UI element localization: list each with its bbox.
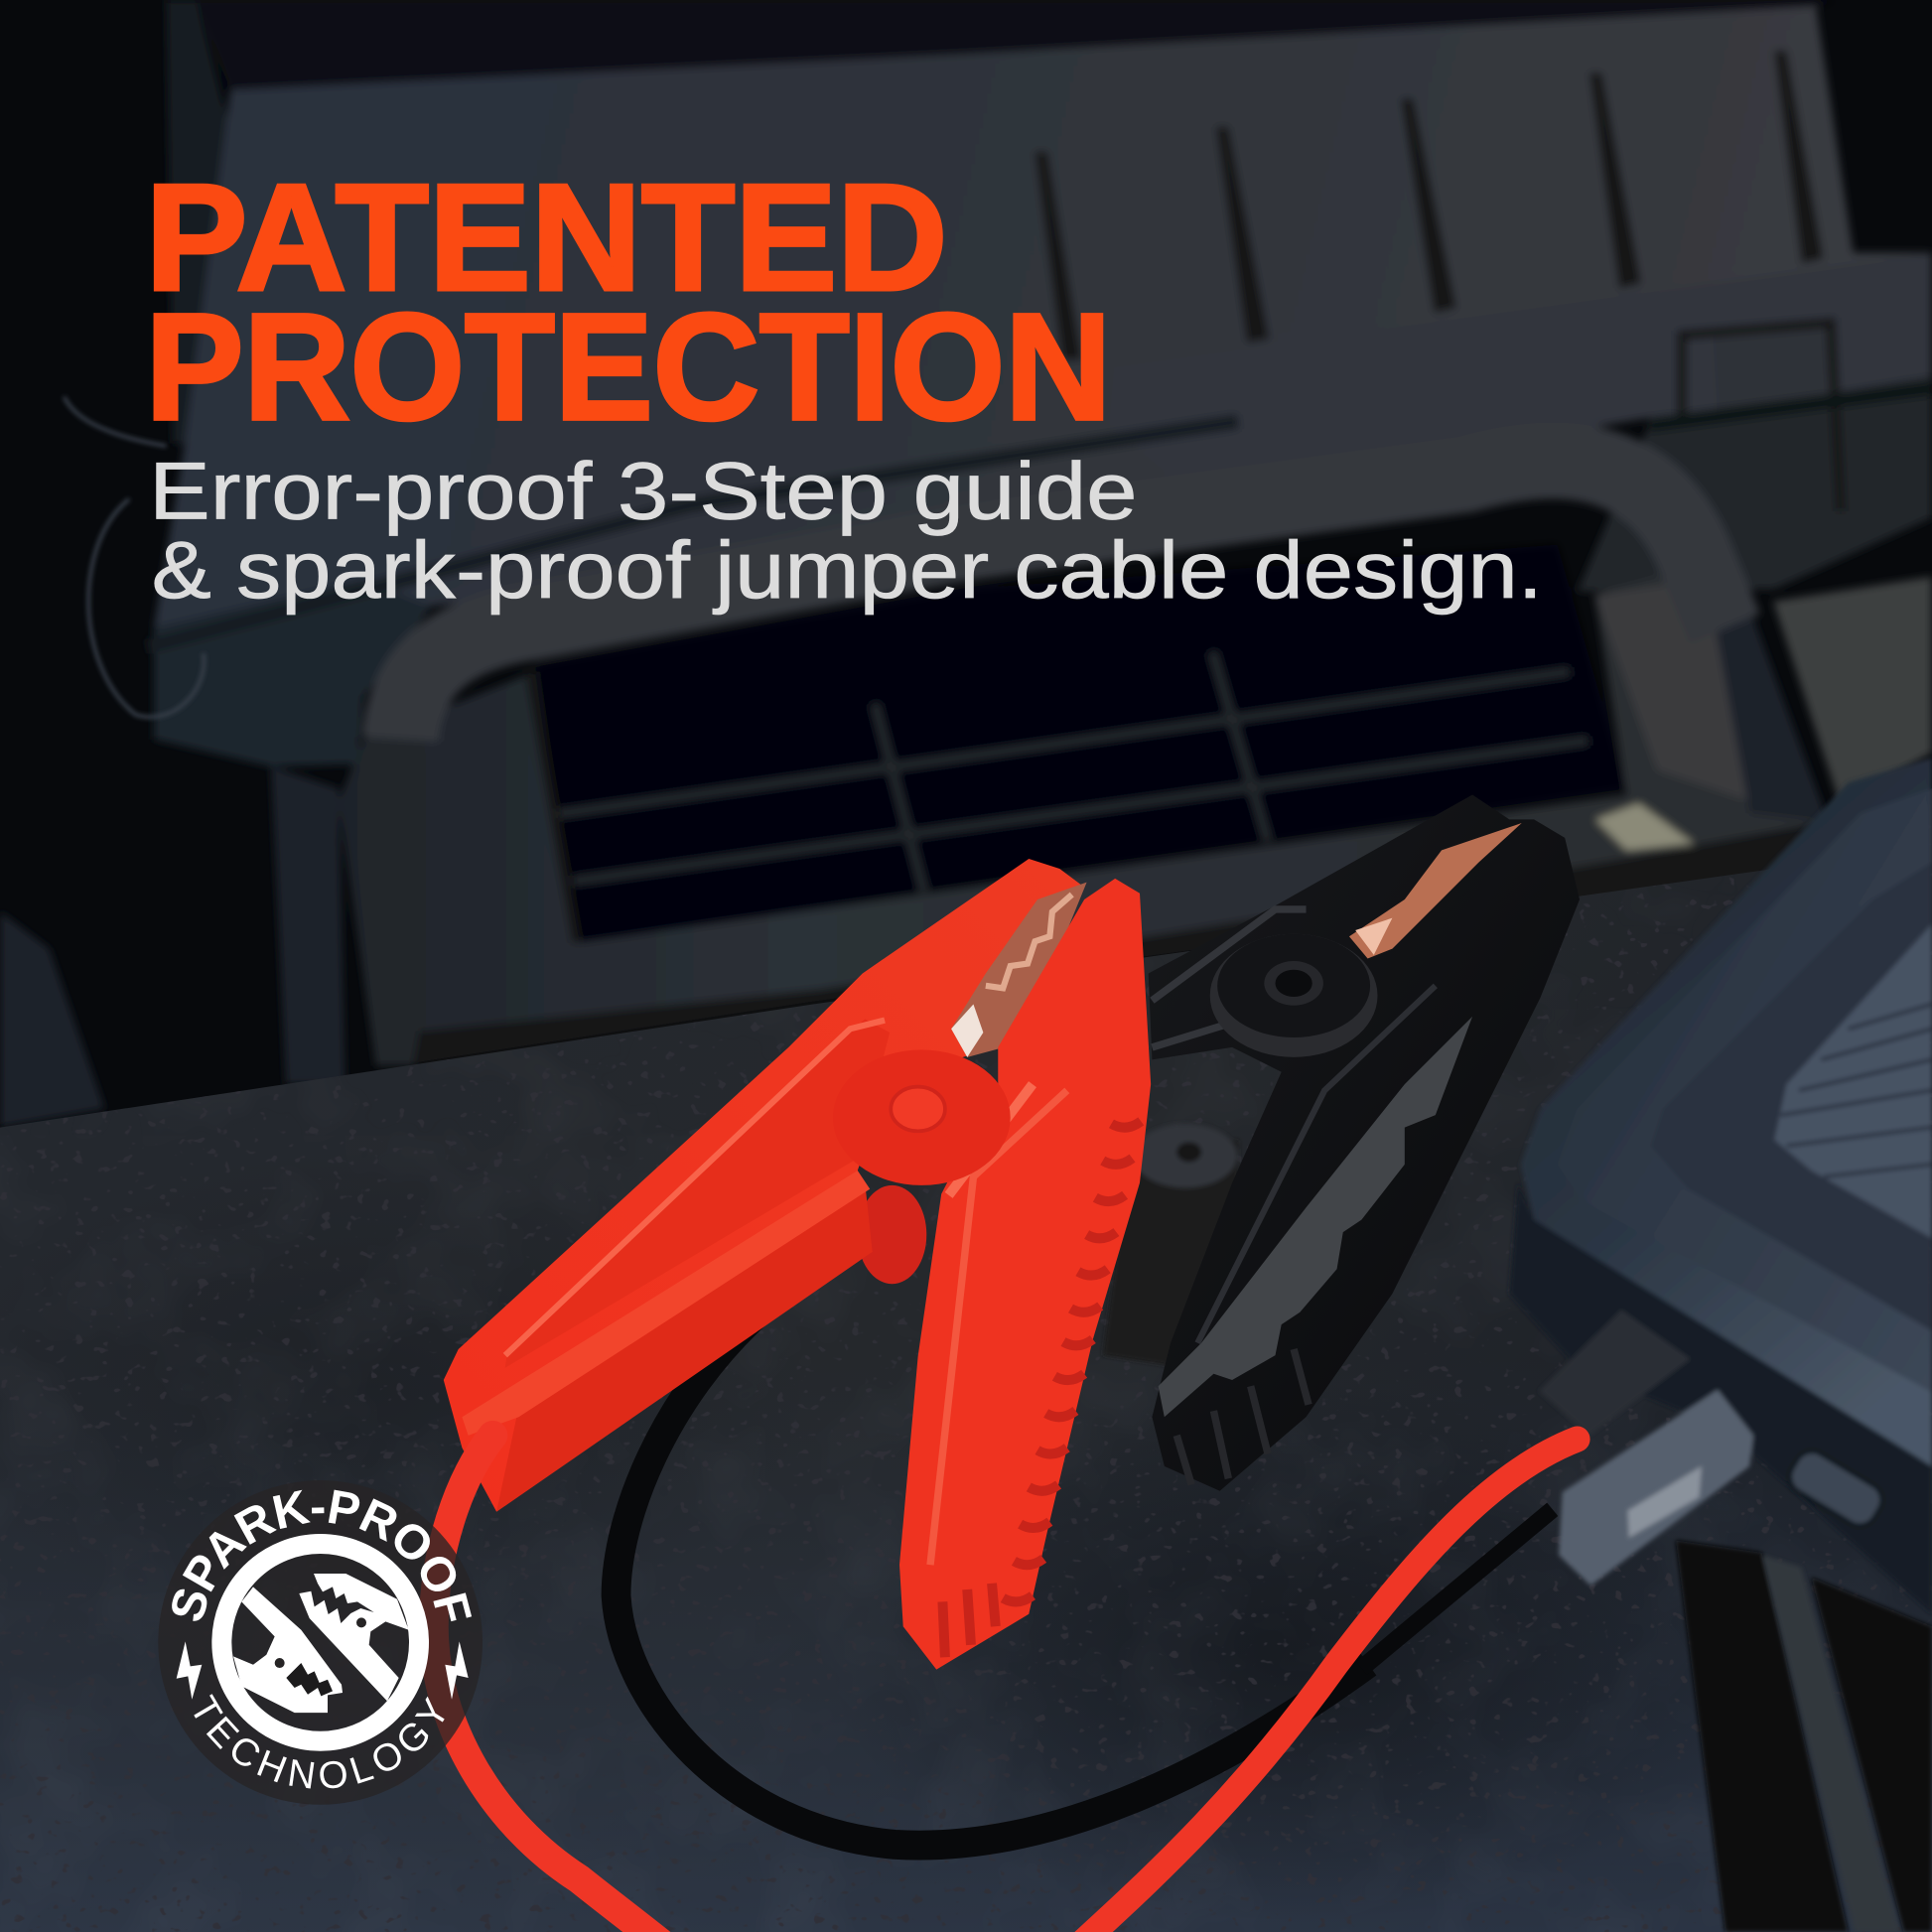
icon: lightning bolts <box>177 1641 469 1700</box>
badge bottom label: TECHNOLOGY <box>194 1694 445 1789</box>
jump starter device <box>1509 758 1932 1614</box>
title: PROTECTION <box>145 283 1111 452</box>
device top plate <box>1520 758 1932 1466</box>
subtitle: Error-proof 3-Step guide <box>149 446 1138 536</box>
grey plug <box>1559 1390 1753 1586</box>
red clamp lower handle <box>444 859 1084 1512</box>
textured ground surface <box>0 788 1932 1932</box>
black clamp pivot <box>1210 934 1378 1057</box>
red clamp teeth <box>942 1121 1141 1657</box>
spark-proof badge <box>159 1480 483 1805</box>
device side wall <box>1509 1182 1932 1614</box>
red clamp <box>444 859 1151 1670</box>
title: PATENTED <box>145 154 947 323</box>
device button <box>1783 1445 1888 1532</box>
loose wire at left <box>65 397 204 717</box>
red clamp jaw copper <box>951 883 1087 1057</box>
red wire <box>434 1436 1578 1932</box>
badge disc <box>158 1480 483 1805</box>
badge top label: SPARK-PROOF <box>172 1489 473 1622</box>
cable connector <box>1539 1310 1691 1436</box>
icon: no-clamps symbol <box>221 1544 419 1741</box>
red clamp spring <box>858 1185 926 1284</box>
bracket at right <box>1578 376 1932 592</box>
cylinder post behind clamps <box>1103 1124 1238 1368</box>
red clamp front jaw <box>899 879 1151 1670</box>
device ribbed panel <box>1774 924 1932 1238</box>
subtitle <box>149 446 1543 616</box>
red clamp pivot <box>833 1049 1011 1185</box>
black wire <box>617 1315 1553 1846</box>
subtitle: & spark-proof jumper cable design. <box>152 525 1543 616</box>
vent opening <box>536 545 1626 942</box>
left bracket under lid <box>154 579 431 766</box>
title <box>145 154 1111 452</box>
black clamp grip highlight <box>1159 1017 1472 1417</box>
black clamp <box>1149 794 1580 1491</box>
